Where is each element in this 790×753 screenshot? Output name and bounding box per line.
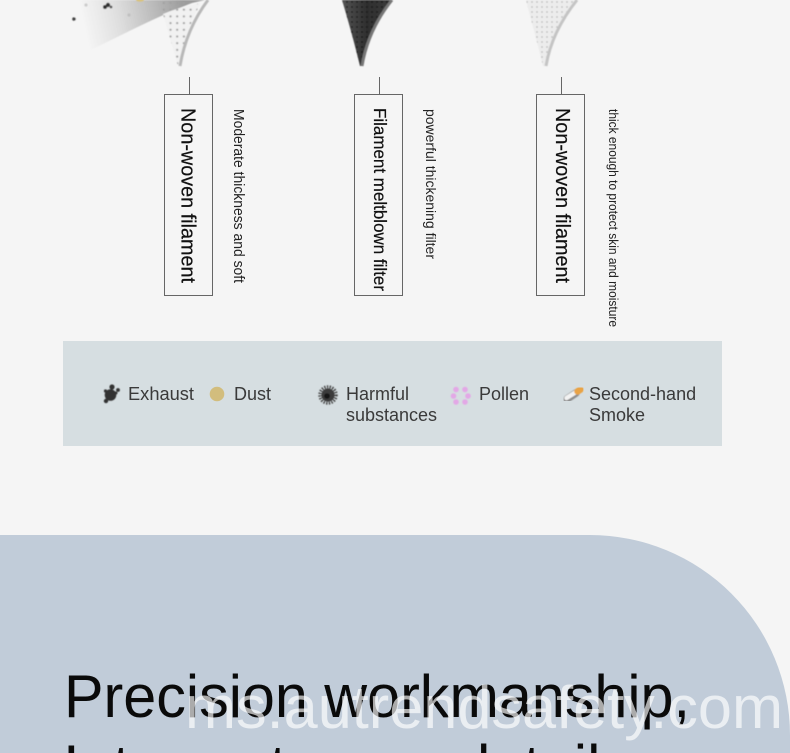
icon: non-woven layer one xyxy=(72,0,208,66)
label box: non-woven filament 1: Non-woven filament xyxy=(176,108,198,283)
text: exhaust: Exhaust xyxy=(128,384,194,404)
text: harmful substances: substances xyxy=(346,405,437,425)
watermark: ms.autrendsafety.com xyxy=(185,674,783,741)
caption: powerful thickening: powerful thickening filter xyxy=(423,109,438,260)
icon: exhaust xyxy=(104,384,120,403)
caption: moderate thickness: Moderate thickness and soft xyxy=(230,109,246,283)
panel: blue curved section xyxy=(0,535,790,753)
heading: precision workmanship: Precision workmanship, xyxy=(64,663,690,730)
label box: non-woven filament 2: Non-woven filament xyxy=(551,108,573,283)
label box: non-woven filament 2 xyxy=(536,77,584,296)
text: second-hand smoke: Second-hand xyxy=(589,384,696,404)
icon: pollen xyxy=(451,387,471,405)
caption: thick enough: thick enough to protect skin and moisture xyxy=(606,109,620,327)
icon: non-woven layer three xyxy=(526,0,577,66)
icon: meltblown filter layer xyxy=(342,0,392,66)
heading: second line xyxy=(63,735,600,753)
icon: dust xyxy=(210,387,224,401)
text: pollen: Pollen xyxy=(479,384,529,404)
label box: filament meltblown filter: Filament meltblown filter xyxy=(370,108,390,291)
label box: non-woven filament 1 xyxy=(164,77,212,296)
icon: cigarette xyxy=(566,390,580,399)
legend panel xyxy=(63,341,722,446)
label box: filament meltblown filter xyxy=(354,77,402,296)
text: dust: Dust xyxy=(234,384,271,404)
text: second-hand smoke: Smoke xyxy=(589,405,645,425)
text: harmful substances: Harmful xyxy=(346,384,409,404)
icon: harmful substances xyxy=(320,387,336,403)
